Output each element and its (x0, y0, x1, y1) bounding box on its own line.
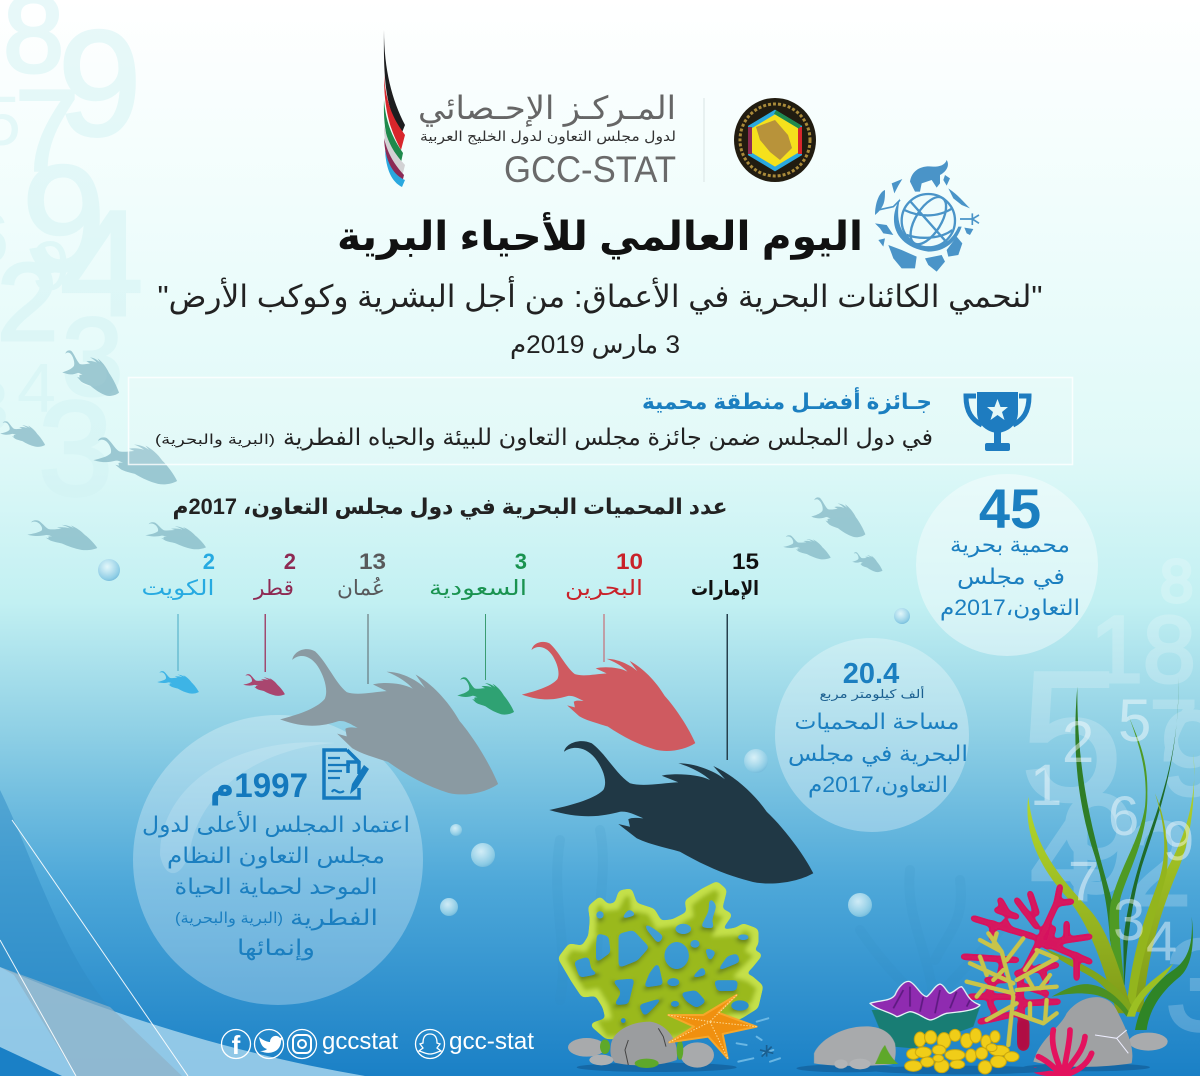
rocks and starfish (left) (568, 995, 780, 1072)
Qatar: 2: 2 (284, 549, 296, 574)
thin numbers over seaweed: 9 (1163, 809, 1194, 872)
panel: 45 reserves: في مجلس (957, 564, 1065, 590)
background numbers right: 8 (1160, 548, 1193, 615)
logo: GCC-STAT (384, 30, 676, 190)
chart title: عدد المحميات البحرية في دول مجلس التعاون، 2017م (172, 494, 728, 520)
icon: trophy (966, 392, 1029, 451)
Saudi Arabia: 3 (429, 549, 527, 715)
panel: 45 reserves: التعاون،2017م (940, 595, 1080, 620)
background numbers top-left (0, 0, 143, 524)
description: محمية بحرية (950, 532, 1070, 557)
panel: 20.4 area: البحرية في مجلس (788, 741, 968, 767)
thin numbers over seaweed: 7 (1068, 849, 1099, 912)
handle gcc-stat: gcc-stat (449, 1028, 534, 1055)
Oman: 13: عُمان (337, 577, 385, 600)
background numbers right: 4 (1030, 782, 1102, 928)
background numbers top-left: 3 (38, 373, 113, 524)
coral: yellow branches (967, 933, 1057, 1045)
Qatar: 2 (243, 549, 296, 696)
background numbers top-left: 9 (58, 0, 141, 167)
figure 20.4: 20.4 (843, 658, 899, 690)
figure 45: 45 (979, 477, 1041, 540)
Kuwait: 2 (142, 549, 215, 694)
yellow polyps (905, 1028, 1019, 1074)
background numbers top-left: 4 (17, 349, 56, 427)
thin numbers over seaweed (1030, 687, 1194, 972)
Bahrain: 10: البحرين (565, 577, 643, 600)
clam (870, 981, 980, 1048)
icon: snapchat (416, 1030, 444, 1058)
thin numbers over seaweed: 2 (1062, 710, 1094, 775)
icon: signed document (324, 750, 369, 798)
Saudi Arabia: 3: 3 (515, 549, 527, 574)
logo arabic name: المـركـز الإحـصائي (418, 90, 676, 127)
background numbers right: 5 (1020, 634, 1123, 840)
coral and clam (right) (797, 887, 1090, 1074)
Oman: 13 (280, 549, 498, 794)
subtitle: "لنحمي الكائنات البحرية في الأعماق: من أجل البشرية وكوكب الأرض" (158, 276, 1042, 315)
background numbers top-left: 4 (60, 179, 143, 347)
panel: 20.4 area (775, 638, 969, 832)
thin numbers over seaweed: 4 (1146, 909, 1177, 972)
background numbers right: 7 (1150, 684, 1197, 779)
coral: green (561, 884, 761, 1037)
small bubbles (98, 559, 910, 917)
background numbers top-left: 3 (62, 296, 123, 419)
Qatar: 2: قطر (253, 577, 294, 600)
bubble: 1997 backdrop (133, 715, 423, 1005)
background numbers right: 18 (1090, 597, 1196, 703)
panel: 1997 resolution: الموحد لحماية الحياة (174, 874, 378, 899)
logo ribbon (384, 30, 405, 187)
swoosh bottom-left (0, 790, 365, 1076)
panel: 1997 resolution: الفطرية (290, 905, 378, 930)
icon: instagram (288, 1030, 316, 1058)
background numbers top-left: 9 (22, 134, 105, 302)
handle gccstat: gccstat (322, 1028, 398, 1055)
background numbers right: 2 (1125, 797, 1192, 931)
logo english name: GCC-STAT (504, 149, 676, 190)
date: 3 مارس 2019م (510, 331, 680, 359)
award qualifier: (البرية والبحرية) (155, 431, 275, 448)
description: مساحة المحميات (794, 709, 960, 734)
Bahrain: 10: 10 (616, 549, 643, 574)
icon: globe with animals (875, 160, 979, 272)
UAE: 15 (549, 549, 813, 884)
unit: ألف كيلومتر مربع (820, 686, 924, 702)
GCC emblem (734, 98, 816, 182)
panel: 20.4 area: التعاون،2017م (808, 772, 948, 797)
icon: starfish (668, 995, 757, 1058)
panel: 1997 resolution: مجلس التعاون النظام (167, 843, 385, 869)
coral: red (963, 887, 1090, 1047)
background numbers right: 9 (1060, 765, 1138, 922)
award heading: جـائزة أفضـل منطقة محمية (642, 386, 932, 415)
Kuwait: 2: 2 (203, 549, 215, 574)
icon: twitter (254, 1030, 284, 1058)
UAE: 15: الإمارات (691, 578, 759, 600)
UAE: 15: 15 (732, 549, 759, 574)
Saudi Arabia: 3: السعودية (429, 577, 527, 600)
logo arabic subtitle: لدول مجلس التعاون لدول الخليج العربية (420, 128, 676, 145)
year: 1997م (210, 767, 308, 806)
panel: 1997 resolution: وإنمائها (237, 935, 315, 961)
background numbers right (1020, 548, 1200, 1058)
icon: facebook (222, 1030, 250, 1060)
Bahrain: 10 (522, 549, 695, 751)
background fish silhouettes (0, 350, 883, 572)
Kuwait: 2: الكويت (142, 577, 214, 600)
social handles (222, 1028, 534, 1060)
award description: في دول المجلس ضمن جائزة مجلس التعاون للبيئة والحياه الفطرية (283, 424, 933, 451)
icon: facebook: f (232, 1030, 241, 1060)
description: اعتماد المجلس الأعلى لدول (142, 811, 410, 838)
thin numbers over seaweed: 3 (1113, 888, 1145, 953)
panel: 45 reserves (916, 474, 1098, 656)
rocks and anemone (right) (1023, 997, 1168, 1076)
panel: award (128, 378, 1072, 464)
seaweed (1027, 677, 1194, 1030)
panel: 1997 resolution (142, 750, 410, 961)
background numbers top-left: 7 (15, 67, 79, 195)
Oman: 13: 13 (359, 549, 386, 574)
thin numbers over seaweed: 1 (1030, 753, 1062, 818)
thin numbers over seaweed: 6 (1108, 784, 1139, 847)
chart: marine reserves by country (142, 549, 813, 884)
title: اليوم العالمي للأحياء البرية (337, 211, 863, 260)
faint seabed silhouettes (557, 830, 1000, 1010)
background numbers top-left: 9 (31, 227, 70, 305)
rock (814, 1026, 898, 1069)
thin numbers over seaweed: 5 (1118, 687, 1151, 754)
panel: 1997 resolution: (البرية والبحرية) (175, 910, 283, 927)
